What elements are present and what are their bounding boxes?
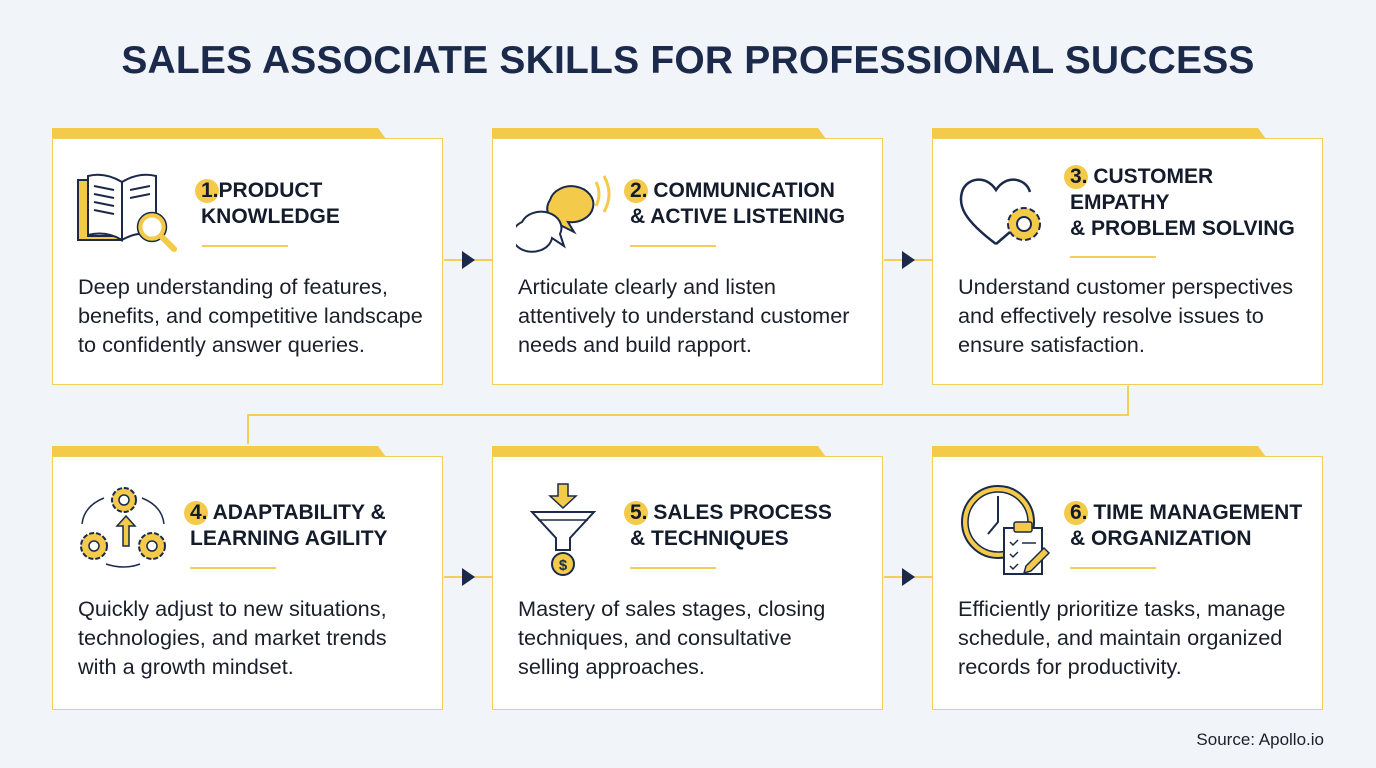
panel: product knowledge [52, 128, 443, 385]
text block [518, 596, 825, 679]
heading: COMMUNICATION [653, 179, 835, 202]
text block: selling approaches. [518, 654, 705, 679]
icon: speech bubbles [516, 175, 610, 253]
heading [624, 501, 832, 550]
text block: technologies, and market trends [78, 625, 387, 650]
heading: 2. [630, 179, 648, 202]
heading: EMPATHY [1070, 191, 1170, 214]
heading: & PROBLEM SOLVING [1070, 217, 1295, 240]
heading: 1. [201, 179, 219, 202]
text block: Deep understanding of features, [78, 274, 388, 299]
heading: TIME MANAGEMENT [1093, 501, 1302, 524]
heading: 6. [1070, 501, 1088, 524]
text block: attentively to understand customer [518, 303, 850, 328]
heading: CUSTOMER [1093, 165, 1213, 188]
text block [78, 596, 387, 679]
heading: & ORGANIZATION [1070, 527, 1252, 550]
panel: time management [932, 446, 1323, 710]
icon: book with magnifier [77, 174, 177, 252]
text block: Efficiently prioritize tasks, manage [958, 596, 1285, 621]
panel: sales process [492, 446, 883, 710]
heading: ADAPTABILITY & [213, 501, 386, 524]
text block [958, 274, 1293, 357]
panel: customer empathy [932, 128, 1323, 385]
heading: & TECHNIQUES [630, 527, 789, 550]
icon: clock and clipboard [961, 485, 1050, 575]
heading: 4. [190, 501, 208, 524]
text block: ensure satisfaction. [958, 332, 1145, 357]
text block: benefits, and competitive landscape [78, 303, 423, 328]
panel: adaptability [52, 446, 443, 710]
heading [195, 179, 340, 228]
text block: Quickly adjust to new situations, [78, 596, 387, 621]
text block: Understand customer perspectives [958, 274, 1293, 299]
heading: 5. [630, 501, 648, 524]
text block: records for productivity. [958, 654, 1182, 679]
text block [78, 274, 423, 357]
text block: with a growth mindset. [78, 654, 294, 679]
icon: gears cycle [80, 487, 166, 568]
heading: KNOWLEDGE [201, 205, 340, 228]
heading: PRODUCT [219, 179, 322, 202]
icon: funnel with dollar: $ [559, 557, 568, 574]
heading: 3. [1070, 165, 1088, 188]
text block [518, 274, 850, 357]
text block: Articulate clearly and listen [518, 274, 776, 299]
icon: funnel with dollar [530, 483, 596, 576]
icon: heart with gear [960, 178, 1041, 245]
panel: communication [492, 128, 883, 385]
text block: Mastery of sales stages, closing [518, 596, 825, 621]
text block: schedule, and maintain organized [958, 625, 1282, 650]
heading: SALES PROCESS [653, 501, 832, 524]
heading: & ACTIVE LISTENING [630, 205, 845, 228]
heading [1064, 165, 1295, 240]
heading [624, 179, 845, 228]
text block: to confidently answer queries. [78, 332, 365, 357]
heading: LEARNING AGILITY [190, 527, 388, 550]
text block: techniques, and consultative [518, 625, 792, 650]
source: Source: Apollo.io [1196, 730, 1324, 749]
text block: needs and build rapport. [518, 332, 752, 357]
text block [958, 596, 1285, 679]
heading [184, 501, 388, 550]
text block: and effectively resolve issues to [958, 303, 1264, 328]
title: SALES ASSOCIATE SKILLS FOR PROFESSIONAL SUCCESS [121, 39, 1255, 82]
heading [1064, 501, 1302, 550]
